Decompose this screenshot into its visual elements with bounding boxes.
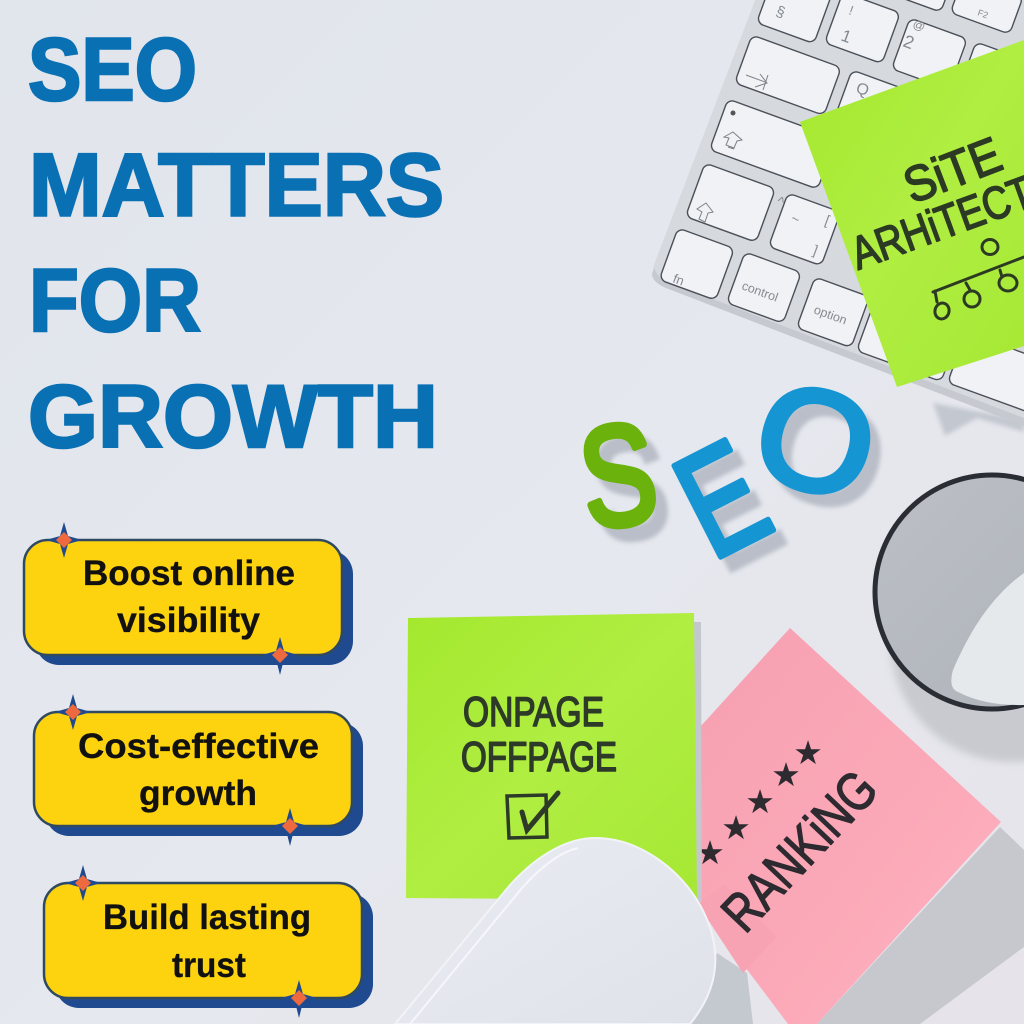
title: FOR bbox=[29, 250, 201, 350]
callout: cost-effective growth bbox=[34, 694, 363, 846]
keyboard: 2 bbox=[901, 31, 917, 53]
SEO letters: S bbox=[583, 405, 678, 572]
keyboard: ! bbox=[847, 3, 856, 18]
title: GROWTH bbox=[28, 366, 438, 466]
keyboard: ^ bbox=[775, 193, 787, 210]
sticky note: ranking: ★ bbox=[745, 783, 775, 820]
callout: build lasting trust: Build lasting bbox=[103, 898, 311, 937]
sticky note: ranking: ★ bbox=[771, 756, 801, 793]
SEO letters: E bbox=[651, 408, 792, 589]
sticky note: ranking: RANKiNG bbox=[710, 759, 889, 943]
keyboard: control bbox=[740, 279, 780, 305]
SEO letters: E bbox=[662, 421, 803, 602]
keyboard: F2 bbox=[976, 7, 990, 20]
keyboard: § bbox=[774, 3, 787, 22]
SEO letters: O bbox=[739, 349, 892, 532]
keyboard: [ bbox=[823, 212, 832, 228]
callout: boost online visibility: visibility bbox=[117, 601, 261, 640]
SEO letters: O bbox=[750, 362, 903, 545]
callout: boost online visibility bbox=[24, 522, 353, 675]
SEO letters bbox=[571, 349, 903, 602]
callout: build lasting trust: trust bbox=[172, 946, 246, 985]
callout: boost online visibility: Boost online bbox=[83, 554, 295, 593]
magnifying glass bbox=[875, 475, 1024, 762]
icon: checkbox bbox=[507, 793, 558, 838]
keyboard: Q bbox=[854, 80, 871, 100]
callout: build lasting trust bbox=[44, 865, 373, 1018]
mouse shadow bbox=[690, 953, 753, 1024]
sticky note: onpage offpage: ONPAGE bbox=[463, 688, 604, 735]
title bbox=[28, 19, 444, 466]
SEO letters: S bbox=[571, 392, 666, 559]
sticky note: ranking: ★ bbox=[695, 834, 725, 871]
keyboard: ~ bbox=[789, 210, 802, 228]
sticky note: site architecture: SiTE bbox=[896, 126, 1009, 214]
callout: cost-effective growth: growth bbox=[139, 774, 257, 813]
mouse bbox=[395, 838, 715, 1024]
title: MATTERS bbox=[29, 134, 444, 234]
callout: cost-effective growth: Cost-effective bbox=[78, 727, 319, 766]
keyboard bbox=[652, 0, 1024, 451]
keyboard: @ bbox=[911, 17, 927, 34]
keyboard: option bbox=[812, 303, 849, 327]
sticky note: ranking bbox=[690, 628, 1001, 1024]
sticky note: site architecture bbox=[800, 40, 1024, 387]
keyboard: fn bbox=[671, 271, 686, 289]
pink note shadow bbox=[817, 827, 1024, 1024]
title: SEO bbox=[28, 19, 197, 119]
sticky note: onpage offpage bbox=[406, 613, 702, 902]
sticky note: ranking: ★ bbox=[721, 809, 751, 846]
keyboard: ] bbox=[811, 242, 820, 258]
sticky note: ranking: ★ bbox=[793, 734, 823, 771]
keyboard: 1 bbox=[839, 26, 854, 47]
sticky note: onpage offpage: OFFPAGE bbox=[461, 733, 617, 780]
